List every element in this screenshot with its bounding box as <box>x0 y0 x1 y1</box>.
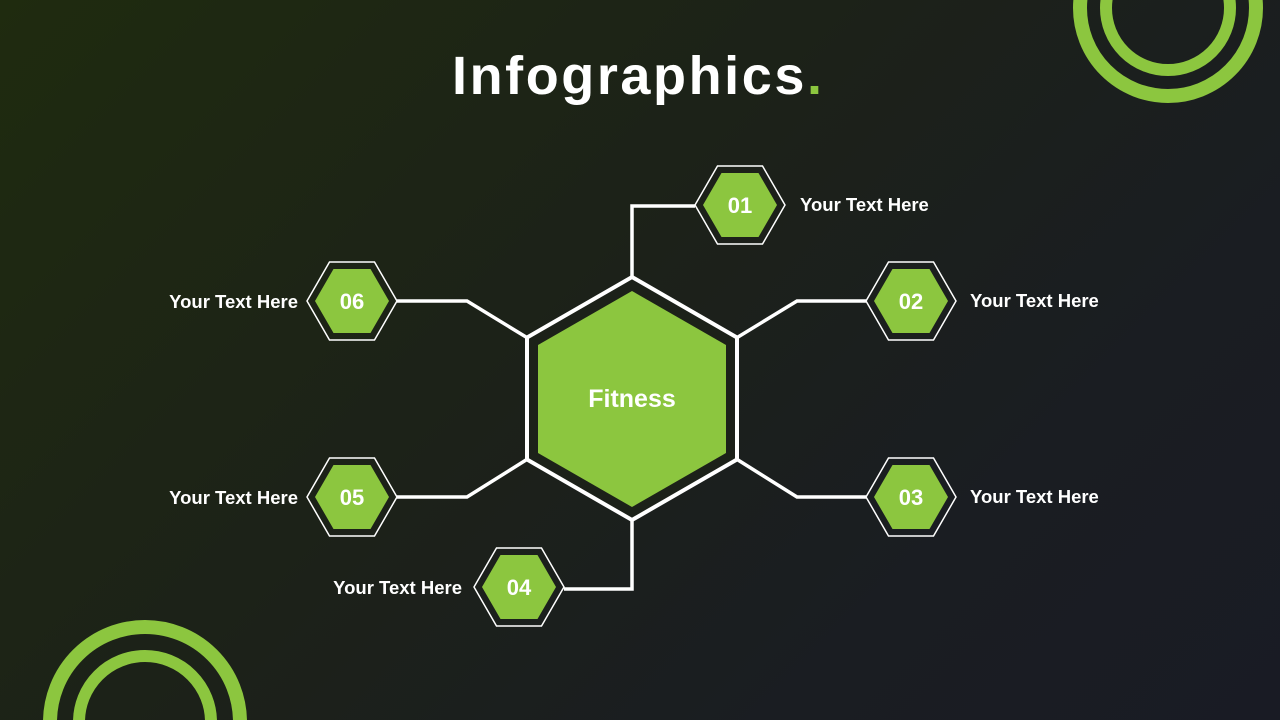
central hexagon: Fitness <box>527 277 737 520</box>
label 04: Your Text Here <box>333 577 462 598</box>
central hexagon: Fitness: Fitness <box>588 385 676 413</box>
hex 01 <box>695 166 785 244</box>
hex 03 <box>866 458 956 536</box>
label 02: Your Text Here <box>970 290 1099 311</box>
hex 04 <box>474 548 564 626</box>
connector lines <box>397 206 866 589</box>
hex 05: 05 <box>340 485 364 510</box>
hex 06 <box>307 262 397 340</box>
label 03: Your Text Here <box>970 486 1099 507</box>
hex 04: 04 <box>507 575 532 600</box>
title: Infographics. <box>452 46 822 106</box>
hex 03: 03 <box>899 485 923 510</box>
label 05: Your Text Here <box>169 487 298 508</box>
hex 06: 06 <box>340 289 364 314</box>
hex 05 <box>307 458 397 536</box>
hex 02 <box>866 262 956 340</box>
label 01: Your Text Here <box>800 194 929 215</box>
hex 01: 01 <box>728 193 752 218</box>
decorative circles top right <box>1080 0 1256 96</box>
hex 02: 02 <box>899 289 923 314</box>
label 06: Your Text Here <box>169 291 298 312</box>
decorative circles bottom left <box>50 627 240 720</box>
